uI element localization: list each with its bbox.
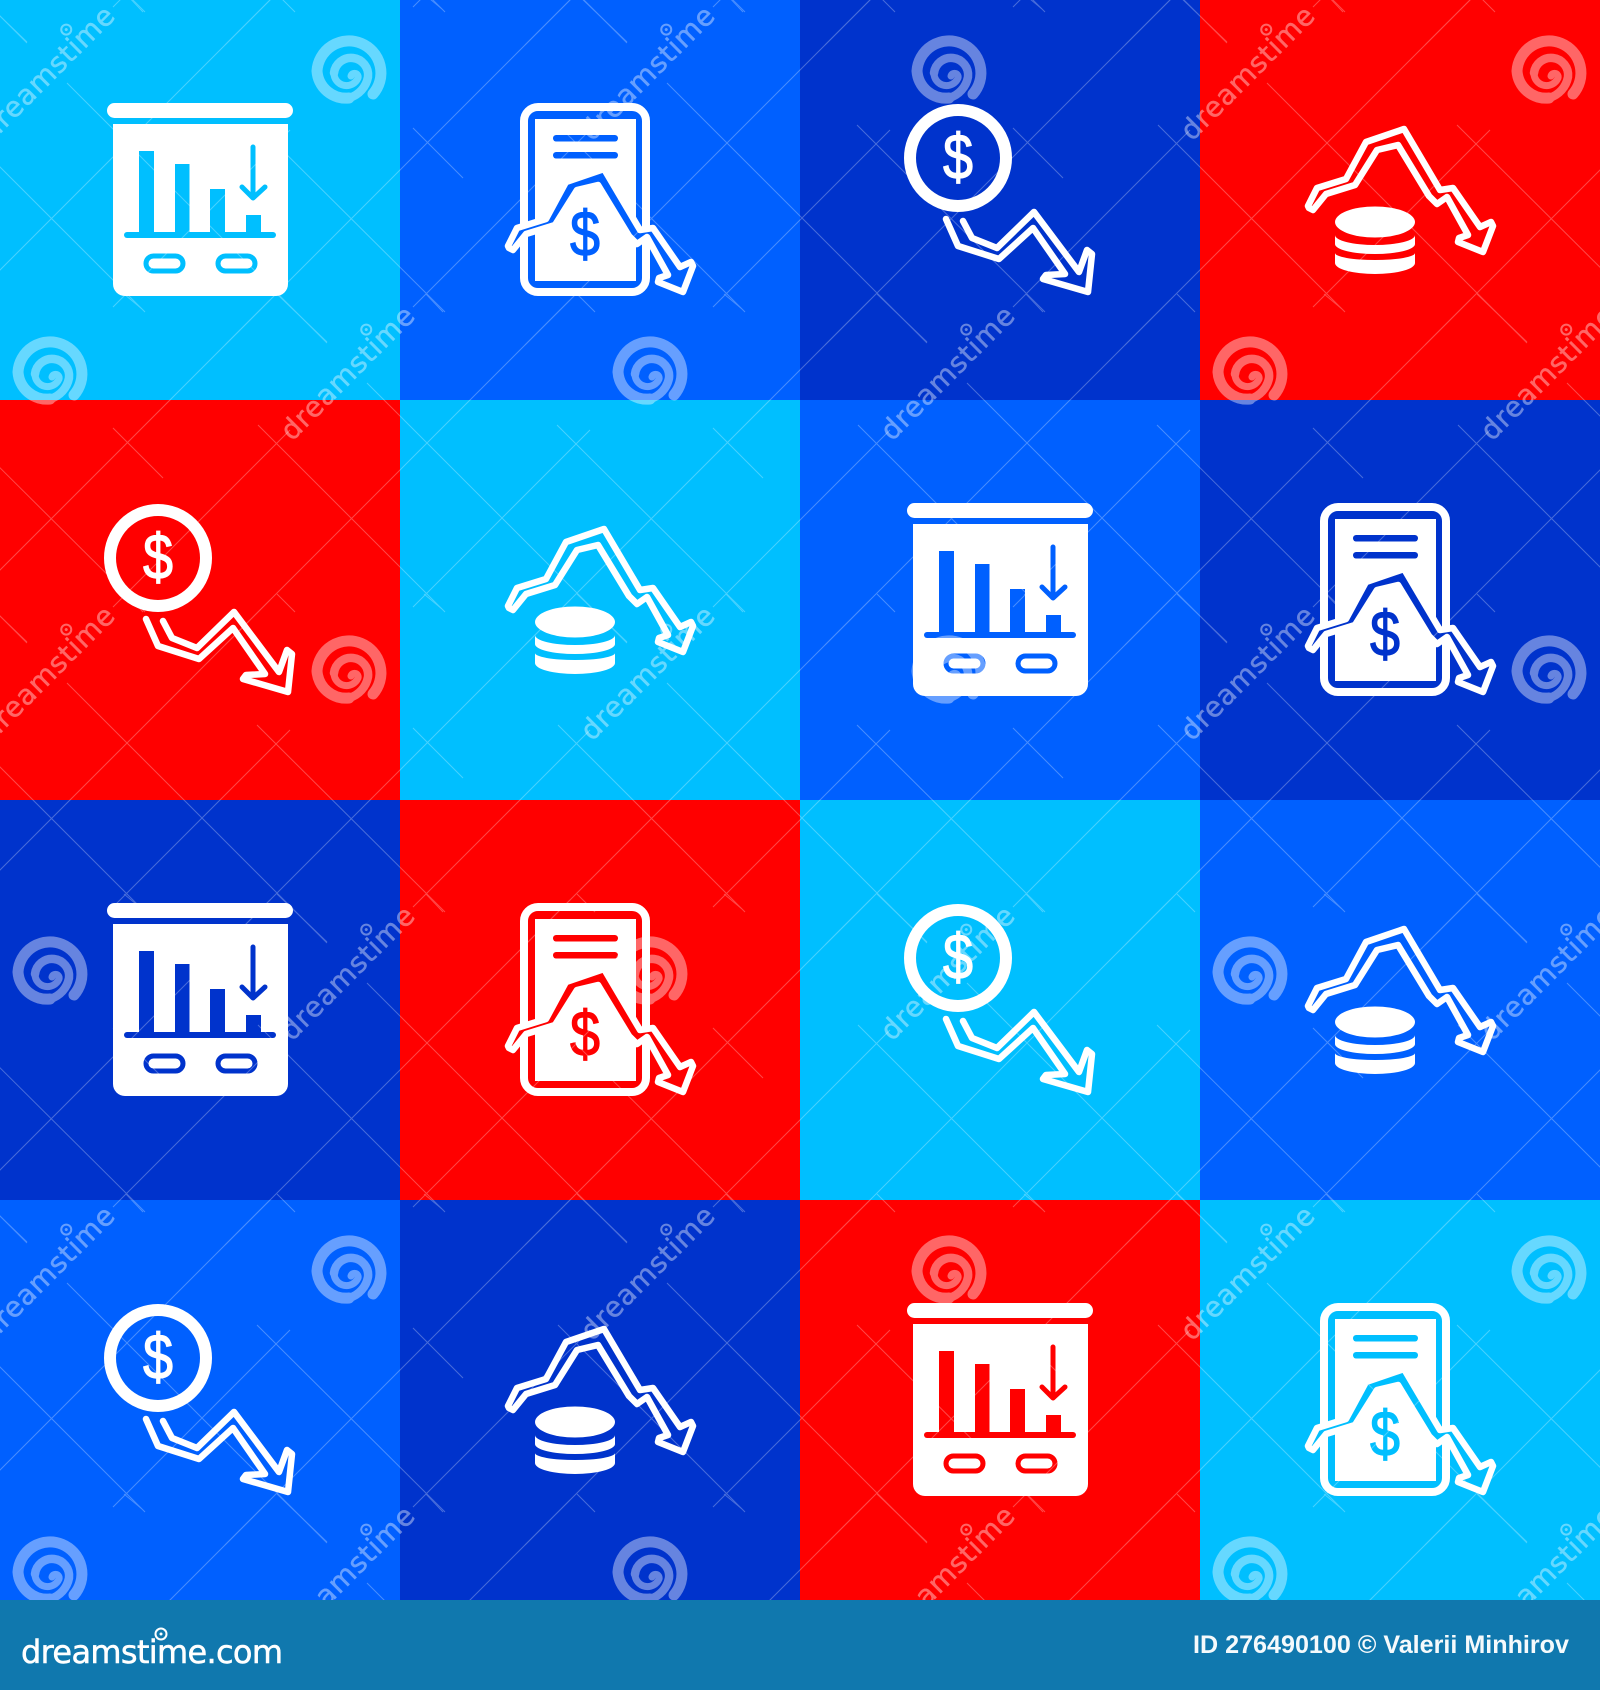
panel: tile row 2 column 4, navy, document bbox=[1200, 400, 1600, 800]
panel: tile row 4 column 3, red, presentation board bbox=[800, 1200, 1200, 1600]
icon: dollar coin with falling arrow bbox=[110, 510, 292, 692]
icon: dollar coin with falling arrow bbox=[110, 1310, 292, 1492]
icon: presentation board with falling bars bbox=[907, 1303, 1093, 1496]
icon: presentation board with falling bars bbox=[907, 503, 1093, 696]
icon: dollar coin with falling arrow: $ bbox=[943, 121, 973, 193]
icon: financial document with falling chart bbox=[1308, 1307, 1493, 1492]
panel: tile row 3 column 1, navy, presentation board bbox=[0, 800, 400, 1200]
icon: financial document with falling chart bbox=[508, 107, 693, 292]
panel: tile row 2 column 1, red, dollar coin bbox=[0, 400, 400, 800]
icon: presentation board with falling bars bbox=[107, 903, 293, 1096]
icon: dollar coin with falling arrow bbox=[910, 110, 1092, 292]
panel: tile row 2 column 3, blue, presentation board bbox=[800, 400, 1200, 800]
panel: tile row 1 column 3, navy, dollar coin bbox=[800, 0, 1200, 400]
icon: financial document with falling chart: $ bbox=[1370, 598, 1400, 670]
panel: tile row 4 column 1, blue, dollar coin bbox=[0, 1200, 400, 1600]
icon: presentation board with falling bars bbox=[107, 103, 293, 296]
icon: dollar coin with falling arrow: $ bbox=[943, 921, 973, 993]
panel: tile row 1 column 2, blue, document bbox=[400, 0, 800, 400]
panel: tile row 1 column 1, cyan, presentation board bbox=[0, 0, 400, 400]
panel: tile row 4 column 4, cyan, document bbox=[1200, 1200, 1600, 1600]
panel: tile row 1 column 4, red, coin stack bbox=[1200, 0, 1600, 400]
panel: tile row 3 column 2, red, document bbox=[400, 800, 800, 1200]
icon: financial document with falling chart bbox=[1308, 507, 1493, 692]
icon: financial document with falling chart: $ bbox=[1370, 1398, 1400, 1470]
panel: tile row 2 column 2, cyan, coin stack bbox=[400, 400, 800, 800]
panel: tile row 3 column 4, blue, coin stack bbox=[1200, 800, 1600, 1200]
icon: financial document with falling chart bbox=[508, 907, 693, 1092]
panel: tile row 4 column 2, navy, coin stack bbox=[400, 1200, 800, 1600]
panel: tile row 3 column 3, cyan, dollar coin bbox=[800, 800, 1200, 1200]
icon: financial document with falling chart: $ bbox=[570, 198, 600, 270]
icon: dollar coin with falling arrow bbox=[910, 910, 1092, 1092]
footer bar bbox=[0, 1600, 1600, 1690]
icon: coin stack with falling trend bbox=[1308, 929, 1493, 1074]
icon: coin stack with falling trend bbox=[1308, 129, 1493, 274]
icon: dollar coin with falling arrow: $ bbox=[143, 1321, 173, 1393]
footer credit text: ID 276490100 © Valerii Minhirov bbox=[1193, 1631, 1569, 1659]
footer logo: dreamstime.com: dreamstime.com bbox=[21, 1633, 283, 1671]
icon: coin stack with falling trend bbox=[508, 529, 693, 674]
icon: coin stack with falling trend bbox=[508, 1329, 693, 1474]
icon: dollar coin with falling arrow: $ bbox=[143, 521, 173, 593]
icon: financial document with falling chart: $ bbox=[570, 998, 600, 1070]
